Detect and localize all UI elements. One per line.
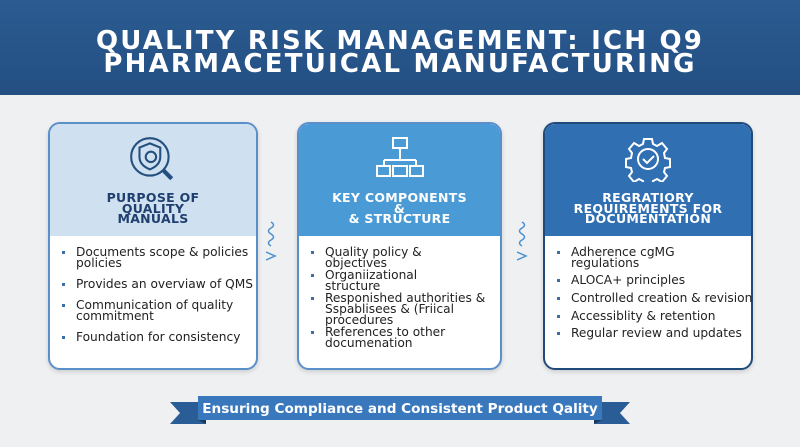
list: key components: Organiizational — [325, 268, 417, 282]
banner ribbon — [170, 396, 630, 424]
panel header: key components — [299, 124, 500, 236]
list: key components: References to other — [325, 325, 445, 339]
banner ribbon: Ensuring Compliance and Consistent Product Qality — [202, 401, 598, 417]
list: key components: Responished authorities & — [325, 291, 485, 305]
list: key components: objectives — [325, 256, 387, 270]
list: key components: Quality policy & — [325, 245, 422, 259]
list: key components: procedures — [325, 313, 393, 327]
panel header: key components: & — [394, 200, 405, 216]
panel header: regulatory: REQUIREMENTS FOR — [574, 200, 722, 216]
list: purpose — [62, 245, 253, 344]
list: regulatory: Adherence cgMG — [571, 245, 675, 259]
panel header: key components: & STRUCTURE — [349, 211, 450, 226]
panel: purpose — [48, 122, 258, 370]
list: purpose: Documents scope & policies — [76, 245, 248, 259]
panel header: purpose: MANUALS — [117, 211, 189, 226]
title: PHARMACETUICAL MANUFACTURING — [103, 49, 697, 79]
panel header: purpose — [50, 124, 256, 236]
list: key components: documenation — [325, 336, 413, 350]
list: purpose: Communication of quality — [76, 298, 233, 312]
list: key components: structure — [325, 279, 380, 293]
list: purpose: Foundation for consistency — [76, 330, 240, 344]
list: regulatory: regulations — [571, 256, 639, 270]
panel header: regulatory: REGRATIORY — [602, 190, 694, 205]
title — [0, 0, 800, 95]
title: QUALITY RISK MANAGEMENT: ICH Q9 — [96, 26, 704, 56]
panel header: purpose: QUALITY — [122, 200, 184, 216]
panel header: regulatory: DOCUMENTATION — [585, 211, 711, 226]
icon: gear check — [625, 138, 671, 182]
list: purpose: commitment — [76, 309, 154, 323]
list: purpose: Provides an overviaw of QMS — [76, 277, 253, 291]
list: purpose: policies — [76, 256, 122, 270]
list: regulatory: Accessiblity & retention — [571, 309, 715, 323]
list: regulatory — [557, 245, 752, 340]
panel: regulatory — [543, 122, 753, 370]
list: key components: Sspablisees & (Friical — [325, 302, 454, 316]
list: regulatory: Regular review and updates — [571, 326, 742, 340]
arrow 1 — [266, 221, 277, 261]
arrow 2 — [516, 221, 528, 261]
panel header: key components: KEY COMPONENTS — [332, 190, 467, 205]
list: regulatory: ALOCA+ principles — [571, 273, 685, 287]
icon: org chart — [376, 137, 424, 177]
panel: key components — [297, 122, 502, 370]
list: regulatory: Controlled creation & revision — [571, 291, 752, 305]
panel header: regulatory — [545, 124, 751, 236]
list: key components — [311, 245, 485, 350]
panel header: purpose: PURPOSE OF — [107, 190, 199, 205]
icon: shield magnifier — [130, 137, 174, 180]
